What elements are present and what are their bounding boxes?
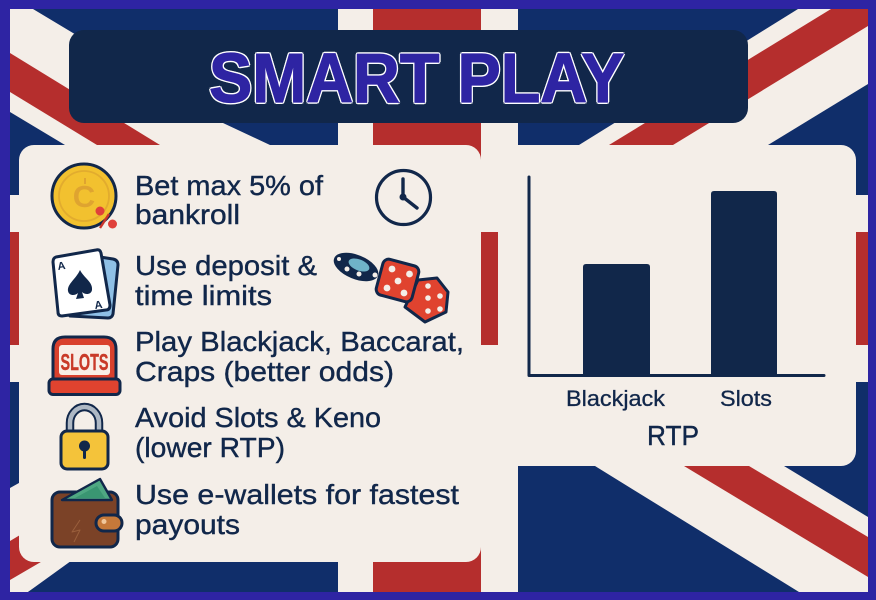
icon: gold coin with percent: [52, 164, 117, 228]
icon: chip and dice: [330, 248, 448, 322]
text: play better odds: Play Blackjack, Baccarat,: [135, 326, 464, 357]
bar chart: [529, 177, 824, 451]
text: bet max: Bet max 5% of: [135, 170, 323, 201]
icon: gold coin with percent: C: [73, 179, 95, 214]
bar: Slots: [711, 191, 777, 375]
text: deposit and time limits: Use deposit &: [135, 250, 317, 281]
text: avoid slots and keno: [135, 402, 381, 463]
title text: SMART PLAY: [209, 39, 624, 117]
text: avoid slots and keno: (lower RTP): [135, 432, 285, 463]
panel: RTP chart: [498, 145, 856, 466]
panel: tips list: [19, 145, 481, 562]
text: e-wallets: Use e-wallets for fastest: [135, 479, 459, 510]
label: Slots: Slots: [720, 386, 772, 411]
text: deposit and time limits: time limits: [135, 280, 272, 311]
icon: clock: [376, 170, 430, 224]
chart axes: [529, 177, 824, 376]
text: play better odds: Craps (better odds): [135, 356, 394, 387]
text: e-wallets: [135, 479, 459, 540]
icon: playing cards: [53, 250, 118, 318]
axis title: RTP: RTP: [647, 420, 699, 451]
icon: playing cards: A: [94, 299, 103, 312]
text: deposit and time limits: [135, 250, 317, 311]
icon: padlock: [61, 407, 108, 469]
text: avoid slots and keno: Avoid Slots & Keno: [135, 402, 381, 433]
bar: Blackjack: [583, 264, 650, 375]
text: bet max: [135, 170, 323, 230]
text: e-wallets: payouts: [135, 509, 240, 540]
icon: slots machine: [49, 337, 120, 394]
text: play better odds: [135, 326, 464, 387]
icon: playing cards: A: [57, 260, 66, 273]
icon: slots machine: SLOTS: [60, 349, 108, 375]
label: Blackjack: Blackjack: [566, 386, 666, 411]
icon: wallet with cash: [52, 479, 122, 547]
text: bet max: bankroll: [135, 199, 240, 230]
title banner: [69, 30, 748, 123]
